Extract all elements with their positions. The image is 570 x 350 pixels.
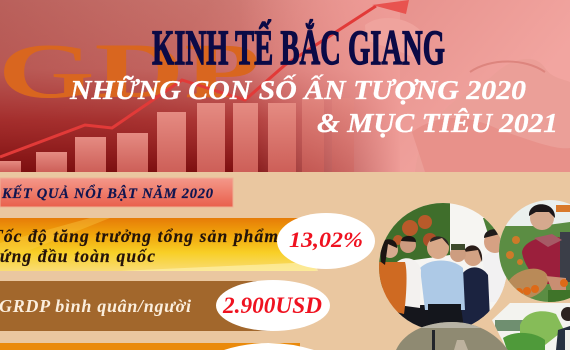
subtitle: & MỤC TIÊU 2021	[317, 108, 558, 138]
value oval: 2.900USD: 2.900USD	[222, 293, 322, 318]
stat row: GRDP per capita	[0, 280, 330, 331]
bar chart graphic	[0, 98, 354, 172]
GDP background lettering: GDP	[0, 27, 260, 114]
header banner	[0, 0, 570, 172]
rising trend arrow	[0, 0, 409, 157]
photo: student with fruit basket	[498, 200, 570, 305]
woman in dark navy	[462, 267, 490, 324]
man in white shirt, right	[496, 278, 506, 302]
stat row: third bar, cropped	[0, 343, 314, 350]
photo: leader with farmers	[378, 202, 510, 335]
section heading bar: KẾT QUẢ NỔI BẬT NĂM 2020	[1, 184, 213, 202]
section heading bar	[0, 178, 233, 207]
photo: greenhouse vegetables	[488, 303, 570, 350]
man in white shirt, left	[397, 258, 421, 308]
subtitle	[69, 74, 558, 138]
value oval: 2.900USD	[216, 280, 330, 331]
stat row: growth rate: Tốc độ tăng trưởng tổng sản phẩm	[0, 226, 278, 246]
pants along the bottom	[398, 305, 488, 328]
subtitle: NHỮNG CON SỐ ẤN TƯỢNG 2020	[69, 74, 527, 105]
value oval: 13,02%	[277, 213, 375, 269]
officer in uniform	[450, 250, 466, 262]
woman in orange	[378, 262, 407, 314]
value oval: 13,02%: 13,02%	[289, 227, 363, 252]
photo: field with farmer	[394, 320, 510, 350]
hand graphic	[365, 18, 570, 172]
central man in blue shirt	[420, 260, 465, 310]
stat row: growth rate	[0, 213, 375, 271]
stat row: GRDP per capita: GRDP bình quân/người	[0, 296, 191, 316]
